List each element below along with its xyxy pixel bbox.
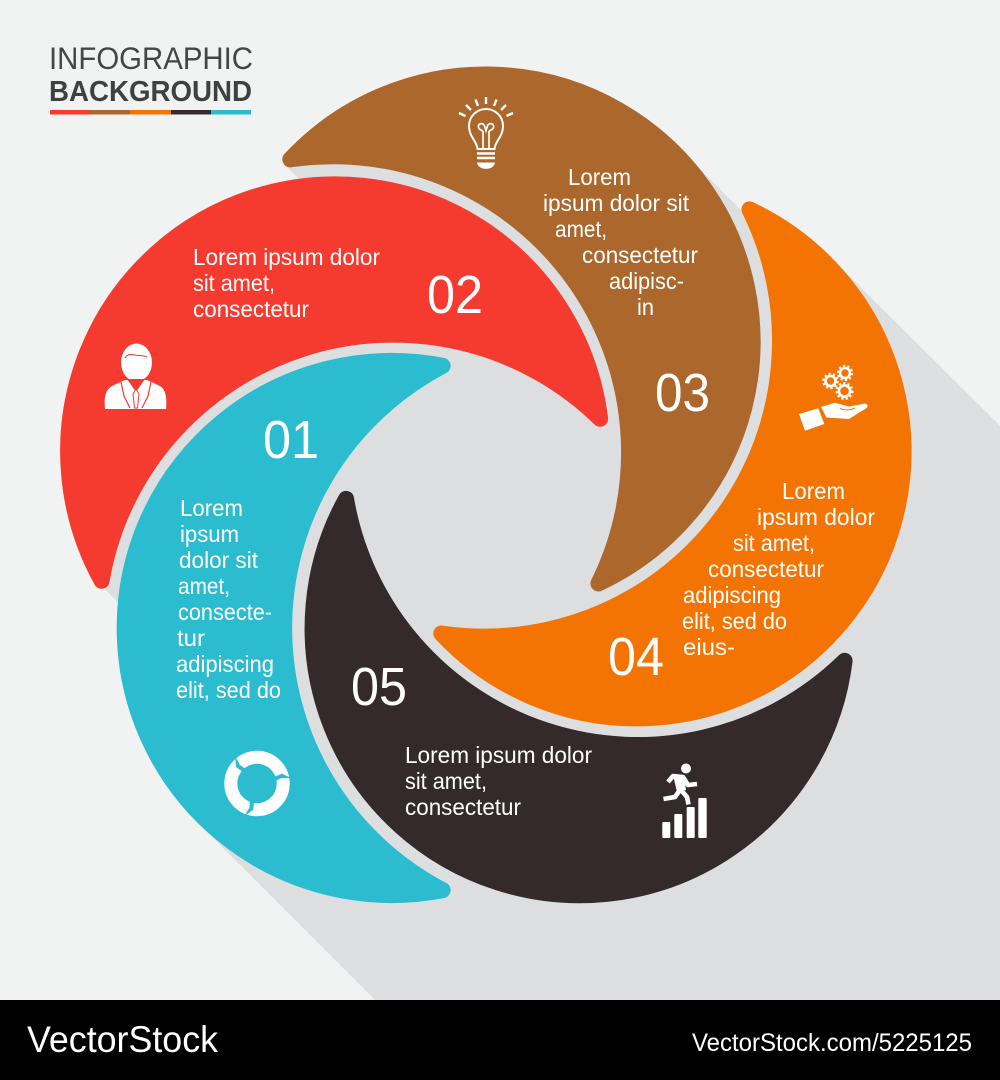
text block 03: ipsum dolor sit <box>543 190 690 216</box>
crescent 01 <box>125 361 443 895</box>
panel: 03 brown <box>287 0 859 587</box>
number 03: 03 <box>655 363 710 423</box>
crescent 03 <box>287 0 859 587</box>
crescent 02 <box>0 115 605 582</box>
text block 05: Lorem ipsum dolor <box>405 742 592 768</box>
icon: circular arrows <box>231 756 292 816</box>
text block 04 <box>682 478 875 660</box>
text block 03: consectetur <box>582 242 698 268</box>
title: INFOGRAPHIC <box>49 40 253 76</box>
text block 03: amet, <box>555 216 607 242</box>
text block 03: adipisc- <box>609 268 684 294</box>
text block 05: consectetur <box>405 794 521 820</box>
text block 04: sit amet, <box>733 530 815 556</box>
text block 01: ipsum <box>180 521 239 547</box>
icon: businessman <box>105 344 166 409</box>
text block 01: amet, <box>178 573 230 599</box>
crescent 04 <box>438 205 1000 824</box>
text block 04: ipsum dolor <box>757 504 875 530</box>
text block 04: adipiscing <box>683 582 781 608</box>
long shadow <box>103 120 1000 1000</box>
number 05: 05 <box>351 657 407 717</box>
text block 01: consecte- <box>178 599 272 625</box>
text block 05 <box>405 742 592 820</box>
text block 01 <box>176 495 281 703</box>
footer url: VectorStock.com/5225125 <box>692 1029 972 1057</box>
footer bar <box>0 1000 1000 1080</box>
panel: 04 orange <box>438 205 1000 824</box>
text block 01: dolor sit <box>179 547 259 573</box>
number 01: 01 <box>263 410 319 470</box>
text block 03 <box>543 164 698 320</box>
text block 04: Lorem <box>782 478 845 504</box>
footer logo: VectorStock <box>27 1019 218 1060</box>
panel: 02 red <box>0 115 605 582</box>
text block 03: Lorem <box>568 164 631 190</box>
text block 04: eius- <box>683 634 735 660</box>
text block 01: elit, sed do <box>176 677 281 703</box>
text block 04: elit, sed do <box>682 608 787 634</box>
text block 02: sit amet, <box>193 270 275 296</box>
text block 02 <box>193 244 380 322</box>
icon: hand with gears <box>799 366 868 431</box>
number 02: 02 <box>427 265 483 325</box>
text block 01: Lorem <box>180 495 243 521</box>
icon: runner on bars <box>662 764 707 838</box>
text block 02: consectetur <box>193 296 309 322</box>
text block 01: adipiscing <box>176 651 274 677</box>
number 04: 04 <box>608 627 664 687</box>
text block 02: Lorem ipsum dolor <box>193 244 380 270</box>
text block 01: tur <box>177 625 205 651</box>
text block 05: sit amet, <box>405 768 487 794</box>
panel: 05 dark <box>243 497 849 965</box>
title: BACKGROUND <box>49 76 252 108</box>
icon: light bulb <box>459 97 513 169</box>
text block 03: in <box>637 294 654 320</box>
text block 04: consectetur <box>708 556 824 582</box>
crescent 05 <box>243 497 849 965</box>
panel: 01 blue <box>125 361 443 895</box>
title <box>49 40 253 114</box>
